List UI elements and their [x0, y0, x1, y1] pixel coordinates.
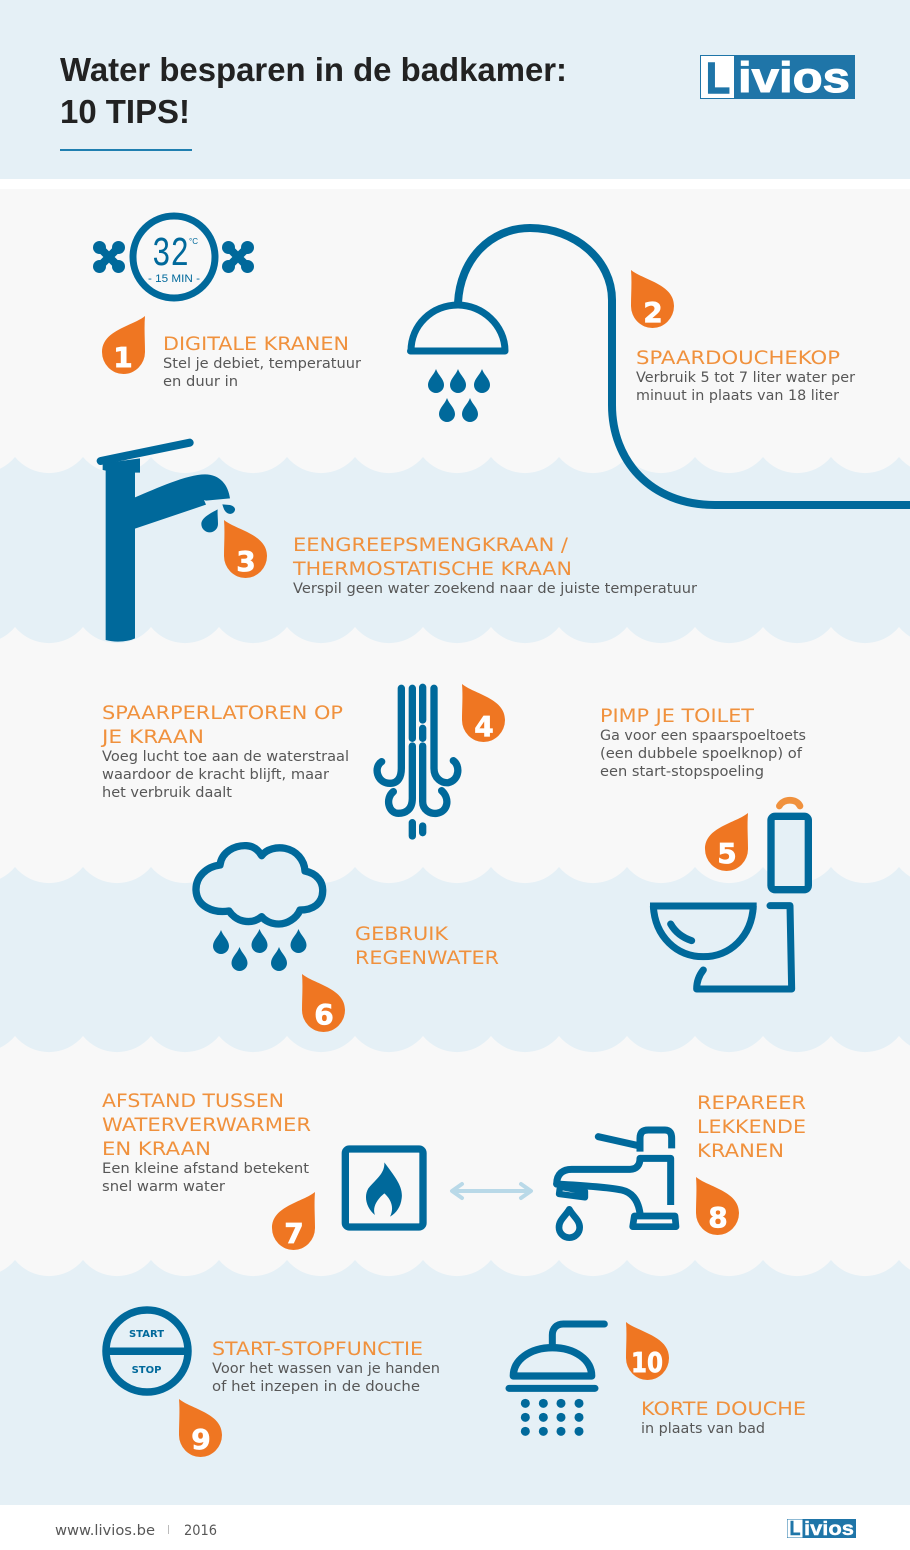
text: digitale kranen — [163, 334, 361, 390]
text: pimp je toilet: een start-stopspoeling — [600, 764, 764, 780]
text: afstand: Een kleine afstand betekent — [102, 1161, 309, 1177]
text: repareer lekkende kranen: REPAREER — [697, 1093, 806, 1114]
tip 4: spaarperlatoren — [101, 684, 505, 836]
header band — [0, 0, 910, 179]
badge 9 — [179, 1399, 222, 1457]
icon: start-stop button — [106, 1310, 188, 1392]
logo: Livios: ivios — [738, 54, 850, 102]
text: gebruik regenwater: GEBRUIK — [355, 924, 449, 945]
text: gebruik regenwater — [355, 924, 499, 969]
text: spaarperlatoren: JE KRAAN — [101, 727, 204, 748]
text: repareer lekkende kranen: KRANEN — [697, 1141, 784, 1162]
text: eengreepsmengkraan: EENGREEPSMENGKRAAN / — [293, 535, 569, 556]
tip 1: digitale kranen — [93, 216, 361, 390]
badge 3 — [224, 520, 267, 578]
icon: digital faucet display — [93, 216, 254, 298]
text: korte douche: KORTE DOUCHE — [641, 1399, 806, 1420]
footer — [55, 1518, 856, 1540]
text: repareer lekkende kranen: LEKKENDE — [697, 1117, 806, 1138]
text: pimp je toilet: PIMP JE TOILET — [600, 706, 755, 727]
text: spaarperlatoren: Voeg lucht toe aan de waterstraal — [102, 749, 349, 765]
text: afstand: EN KRAAN — [102, 1139, 211, 1160]
footer: 2016 — [184, 1523, 217, 1539]
badge 4: 4 — [474, 710, 494, 743]
arrow: double-headed distance arrow — [452, 1184, 531, 1198]
title — [60, 52, 567, 131]
text: pimp je toilet: (een dubbele spoelknop) of — [600, 746, 803, 762]
logo: Livios — [700, 54, 855, 103]
text: eengreepsmengkraan: Verspil geen water zoekend naar de juiste temperatuur — [293, 581, 697, 597]
text: digitale kranen: Stel je debiet, temperatuur — [163, 356, 361, 372]
icon: rain cloud — [196, 846, 323, 971]
icon: digital faucet display: - 15 MIN - — [148, 273, 200, 285]
icon: start-stop button: START — [129, 1329, 164, 1340]
icon: single-lever faucet — [101, 443, 235, 642]
tip 5: toilet — [600, 706, 808, 989]
tip 7: afstand — [102, 1091, 531, 1250]
text: gebruik regenwater: REGENWATER — [355, 948, 499, 969]
icon: leaking tap — [557, 1130, 676, 1238]
footer logo: ivios — [804, 1519, 854, 1540]
footer: www.livios.be — [55, 1523, 155, 1539]
text: digitale kranen: DIGITALE KRANEN — [163, 334, 349, 355]
text: start-stopfunctie — [212, 1339, 440, 1395]
title: 10 TIPS! — [60, 94, 190, 131]
badge 9: 9 — [191, 1423, 211, 1456]
tip 10: korte douche — [509, 1322, 806, 1437]
icon: start-stop button: STOP — [132, 1365, 161, 1376]
text: eengreepsmengkraan — [292, 535, 697, 597]
text: digitale kranen: en duur in — [163, 374, 238, 390]
badge 5: 5 — [717, 837, 737, 870]
title: Water besparen in de badkamer: — [60, 52, 567, 89]
text: eengreepsmengkraan: THERMOSTATISCHE KRAAN — [292, 559, 572, 580]
text: afstand: AFSTAND TUSSEN — [102, 1091, 284, 1112]
badge 10: 10 — [631, 1346, 663, 1379]
text: afstand: WATERVERWARMER — [102, 1115, 311, 1136]
badge 4 — [462, 684, 505, 743]
tip 3: eengreepsmengkraan — [101, 443, 697, 642]
text: spaarperlatoren: waardoor de kracht blijft, maar — [102, 767, 329, 783]
footer logo — [787, 1518, 856, 1540]
text: pimp je toilet — [600, 706, 806, 780]
badge 2: 2 — [643, 296, 663, 329]
text: pimp je toilet: Ga voor een spaarspoeltoets — [600, 728, 806, 744]
logo: Livios: L — [706, 54, 730, 103]
text: spaarperlatoren: het verbruik daalt — [102, 785, 232, 801]
text: afstand — [102, 1091, 311, 1195]
badge 7 — [272, 1192, 315, 1250]
badge 1: 1 — [113, 341, 133, 374]
icon: shower head with dots — [509, 1324, 604, 1436]
tip 9: start-stopfunctie — [106, 1310, 440, 1457]
text: spaardouchekop: SPAARDOUCHEKOP — [636, 348, 840, 369]
text: spaardouchekop: minuut in plaats van 18 liter — [636, 388, 839, 404]
text: spaarperlatoren — [101, 703, 349, 801]
text: spaardouchekop — [636, 348, 855, 404]
text: spaarperlatoren: SPAARPERLATOREN OP — [102, 703, 343, 724]
badge 6: 6 — [314, 998, 334, 1031]
text: spaardouchekop: Verbruik 5 tot 7 liter water per — [636, 370, 855, 386]
badge 8: 8 — [708, 1201, 728, 1234]
tip 2: spaardouchekop — [410, 228, 910, 505]
badge 1 — [102, 316, 145, 374]
footer logo: L — [790, 1518, 800, 1540]
icon: water heater with flame — [345, 1149, 423, 1227]
icon: digital faucet display: °C — [189, 237, 198, 246]
text: start-stopfunctie: Voor het wassen van je handen — [212, 1361, 440, 1377]
badge 6 — [302, 974, 345, 1032]
text: korte douche — [641, 1399, 806, 1437]
text: start-stopfunctie: of het inzepen in de douche — [212, 1379, 420, 1395]
badge 10 — [626, 1322, 669, 1380]
badge 5 — [705, 813, 748, 871]
text: repareer lekkende kranen — [697, 1093, 806, 1162]
icon: toilet — [650, 800, 808, 989]
badge 2 — [631, 270, 674, 329]
tip 8: lekkende kranen — [557, 1093, 806, 1238]
icon: shower with long pipe — [410, 228, 910, 505]
tip 6: regenwater — [196, 846, 499, 1032]
badge 7: 7 — [284, 1217, 304, 1250]
icon: aerator — [377, 687, 458, 836]
text: start-stopfunctie: START-STOPFUNCTIE — [212, 1339, 423, 1360]
badge 3: 3 — [236, 545, 256, 578]
badge 8 — [696, 1177, 739, 1235]
text: afstand: snel warm water — [102, 1179, 225, 1195]
icon: digital faucet display: 32 — [152, 232, 189, 278]
text: korte douche: in plaats van bad — [641, 1421, 765, 1437]
